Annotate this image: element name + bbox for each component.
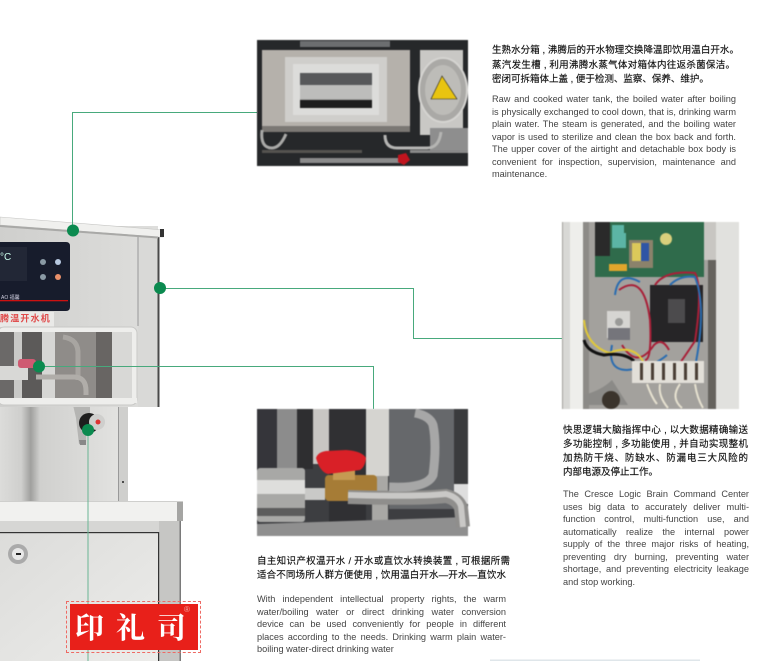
text block: conversion valve: device can be used conveniently for people in different [257,619,506,629]
dot: faucet [82,424,94,436]
connector line: control photo [160,288,562,338]
text block: control center: uses big data to accurately deliver multi- [563,502,749,512]
logo stamp: ® [184,605,190,614]
water dispenser machine: 腾温开水机 [0,312,51,324]
window frame [0,327,137,405]
text block: control center: preventing dry burning, preventing water [563,552,749,562]
upper body [0,226,158,407]
text block: conversion valve: water/boiling water or direct drinking water conversion [257,606,506,616]
text block: water tank: 密闭可拆箱体上盖 , 便于检测、监察、保养、维护。 [492,74,709,85]
counter top [0,501,183,521]
text block: control center: supply of the three major risks of heating, [563,539,749,549]
text block: water tank: convenient for inspection, supervision, maintenance and [492,156,736,166]
dot: top [67,224,79,236]
lid [0,217,163,237]
text block: conversion valve: 自主知识产权温开水 / 开水或直饮水转换装置 , 可根据所需 [257,556,510,567]
text block: control center: and stop working. [563,576,635,586]
text block: conversion valve [257,556,510,654]
logo text: 印礼司 [75,606,198,647]
connector line: faucet [87,430,89,661]
text block: control center: automatically realize the internal power [563,526,749,536]
text block: control center: shortage, and preventing electricity leakage [563,564,749,574]
text block: conversion valve: 适合不同场所人群方便使用 , 饮用温白开水—开水—直饮水 [257,570,506,581]
faucet [73,405,90,444]
water dispenser machine: °C [0,252,11,263]
text block: conversion valve: places according to the needs. Drinking warm plain water- [257,632,506,642]
text block: water tank: vapor is used to sterilize and clean the box back and forth. [492,132,736,142]
text block: water tank [492,44,739,179]
text block: control center: The Cresce Logic Brain Command Center [563,489,749,499]
text block: water tank: is physically exchanged to cool down, that is, drinking warm [492,106,736,116]
cabinet base [0,520,180,661]
text block: control center: 快思逻辑大脑指挥中心 , 以大数据精确输送 [563,425,748,436]
water dispenser machine: AO 福馨 [1,294,20,301]
dot: valve [33,360,45,372]
text block: control center: function control, multi-function use, and [563,514,749,524]
text block: control center: 多功能控制 , 多功能使用 , 并自动实现整机 [563,439,748,450]
text block: water tank: Raw and cooked water tank, the boiled water after boiling [492,94,736,104]
lower body [0,405,118,501]
text block: water tank: plain water. The steam is generated, and the boiling water [492,119,736,129]
display panel [0,242,70,311]
text block: control center: 内部电源及停止工作。 [563,467,658,478]
red machine label [0,312,54,327]
text block: conversion valve: boiling water-direct drinking water [257,644,394,654]
logo stamp [66,601,201,653]
text block: water tank: maintenance. [492,169,547,179]
text block: control center [563,424,749,587]
connector line: top photo [72,112,257,230]
text block: water tank: 生熟水分箱 , 沸腾后的开水物理交换降温即饮用温白开水。 [492,45,739,56]
text block: conversion valve: With independent intellectual property rights, the warm [257,594,506,604]
text block: control center: 加热防干烧、防缺水、防漏电三大风险的 [563,453,748,464]
dot: control [154,282,166,294]
connector line: valve photo [40,366,374,409]
text block: water tank: 蒸汽发生槽 , 利用沸腾水蒸气体对箱体内往返杀菌保洁。 [492,60,735,70]
text block: water tank: The upper cover of the airtight and detachable box body is [492,144,736,154]
